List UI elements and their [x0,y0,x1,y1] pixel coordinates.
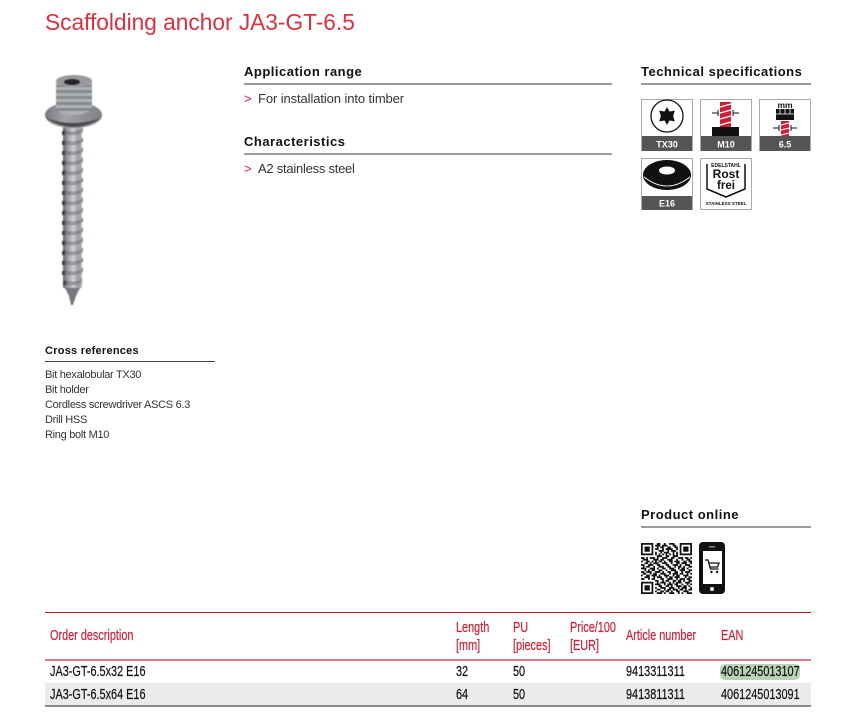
bullet text: A2 stainless steel [258,161,355,176]
icon: smartphone with cart [699,542,725,594]
heading: application range: Application range [244,64,362,79]
section: cross references [45,345,215,441]
icon: E16 washer: E16 [659,198,675,208]
table row 1: 50 [513,664,525,680]
list of references: Bit holder [45,384,89,396]
list of references [45,369,190,441]
table header: Order description [50,628,133,644]
icon: Rost frei stainless steel: EDELSTAHL [711,163,741,169]
title: Scaffolding anchor JA3-GT-6.5 [45,9,355,35]
table row 2: JA3-GT-6.5x64 E16 [50,687,146,703]
heading: characteristics: Characteristics [244,134,345,149]
table header: [EUR] [570,638,599,654]
table row 1: 4061245013107 [721,664,800,680]
icon: Rost frei stainless steel [700,158,752,210]
table header: [pieces] [513,638,550,654]
shank [62,124,83,305]
table row 2: 4061245013091 [721,687,800,703]
table header: Length [456,620,489,636]
table row 2 [45,683,811,705]
order table [45,612,811,707]
table header: EAN [721,628,743,644]
list of references: Drill HSS [45,414,87,426]
icon: 6.5: mm [777,100,793,110]
list of references: Cordless screwdriver ASCS 6.3 [45,399,190,411]
icon: Rost frei stainless steel: Rost [713,167,739,181]
table header: Price/100 [570,620,616,636]
icon: 6.5: 6.5 [779,140,791,150]
bullet text: > [244,161,251,176]
icon: 6.5 [759,99,811,151]
highlighted EAN [720,664,800,680]
product image: screw anchor [44,74,103,306]
icon: M10 [700,99,752,151]
section: characteristics [244,134,612,176]
table header: Article number [626,628,696,644]
table header: PU [513,620,528,636]
heading: technical specifications: Technical specifications [641,64,802,79]
icon: QR code [641,543,692,594]
heading: cross references: Cross references [45,345,139,357]
icon: M10: M10 [717,140,735,150]
table row 2: 50 [513,687,525,703]
table row 1: 32 [456,664,468,680]
heading: product online: Product online [641,507,739,522]
icon: Rost frei stainless steel: STAINLESS STEEL [706,201,747,206]
list of references: Bit hexalobular TX30 [45,369,141,381]
table header [50,620,743,654]
table row 2: 9413811311 [626,687,685,703]
section: application range [244,64,612,106]
table row 1: 9413311311 [626,664,685,680]
section: technical specifications [641,64,811,210]
table row 2: 64 [456,687,468,703]
table header: [mm] [456,638,480,654]
icon: Rost frei stainless steel: frei [717,180,735,192]
icon: TX30: TX30 [656,140,678,150]
table row 1 [50,664,800,680]
list of references: Ring bolt M10 [45,429,109,441]
icon: E16 washer [641,158,693,210]
bullet text: For installation into timber [258,91,404,106]
table row 1: JA3-GT-6.5x32 E16 [50,664,146,680]
bullet text: > [244,91,252,106]
washer [45,102,102,128]
threaded stud [56,75,92,115]
icon: TX30 [641,99,693,151]
section: product online [641,507,811,594]
